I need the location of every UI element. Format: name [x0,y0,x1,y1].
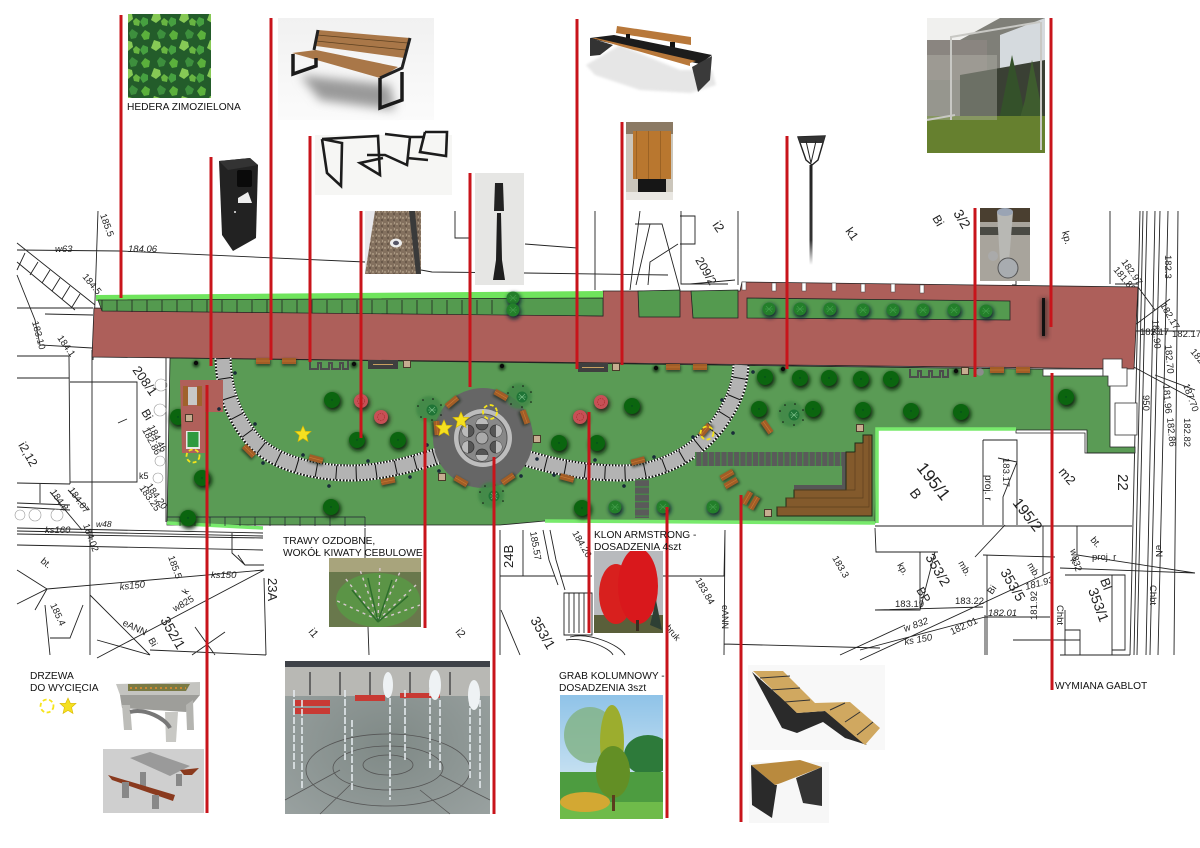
label: ornamental grasses: WOKÓŁ KIWATY CEBULOWE [283,546,423,559]
photo: chess table [103,749,204,813]
photo: wooden litter bin [626,122,673,200]
map annotations: w 832 [902,616,931,635]
plot labels: 183.17 [1000,458,1011,487]
plot labels: 195/1 [913,459,954,504]
map annotations: kp. [1059,230,1073,246]
hedge strip [96,291,603,319]
trees [170,369,1076,529]
fountain plaza [433,388,533,488]
photo: steel bike racks [315,132,452,195]
map annotations: BP [913,584,934,605]
map annotations: 184.06 [128,244,158,255]
map annotations: 184.20 [144,481,169,512]
map annotations: 184.26 [569,529,593,560]
map annotations: 182.01 [949,615,980,638]
long benches [368,360,608,372]
plot labels: 22 [1114,474,1131,491]
map annotations: 182.01 [988,608,1017,619]
ornamental shrubs [416,383,804,508]
map annotations: 185.57 [527,531,543,561]
label: trees to remove: DRZEWA [30,671,74,682]
map annotations: 182.86 [139,426,163,457]
map annotations: 183.84 [692,576,716,607]
map annotations: 187.70 [1180,382,1200,413]
map annotations: 181.93 [1024,575,1056,593]
map annotations: bt. [1088,535,1103,550]
map annotations: eANN [121,618,148,638]
map annotations: 181.96 [1160,384,1174,414]
label: trees to remove: DO WYCIĘCIA [30,683,99,694]
map annotations: 184.1 [55,333,77,359]
map annotations: bruk [663,623,683,643]
stepped timber deck [777,435,872,516]
map annotations: w48 [96,519,112,529]
photo: wooden lounger [748,665,885,750]
lawn bottom hatch [167,517,365,527]
photo: drinking fountain bollard [980,208,1030,281]
map annotations: 185.5 [165,554,184,580]
picnic zone [180,380,223,453]
street pavement [92,282,1138,369]
small path lights [218,371,754,487]
park lawn [167,358,1135,525]
map annotations: ks150 [211,570,237,581]
map annotations: Bi [138,406,156,423]
photo: columnar hornbeam [560,695,672,819]
map annotations: Chbt [1147,585,1158,605]
photo: wooden stool [749,760,829,823]
photo: street lamp [798,136,825,265]
dark paving strips [635,452,842,518]
map annotations: 184.46 [145,423,169,454]
trees to remove: dashed circles [186,405,714,462]
map annotations: 184.07 [66,485,91,516]
map annotations: 183.10 [29,320,47,351]
map annotations: 209/2 [692,254,720,288]
map annotations: 353/1 [1085,586,1112,624]
map annotations: 184.02 [80,522,100,553]
map annotations: 185.4 [47,602,67,628]
display case [1040,298,1048,338]
photo: bench with planter [586,26,716,93]
corner white boxes [1043,359,1137,435]
litter bins [186,360,968,516]
label: hornbeam: DOSADZENIA 3szt [559,683,646,694]
map annotations: 185.5 [97,212,116,238]
benches [241,358,1031,512]
map annotations: Bi [985,583,999,597]
map annotations: w832 [1067,547,1084,573]
map annotations: bt. [38,556,53,571]
plot labels: B [907,485,925,502]
map annotations: k1 [843,225,861,243]
map annotations: Bl [1097,576,1115,592]
map annotations: 181.92 [1029,591,1040,620]
trees to remove: stars [295,412,469,442]
map annotations: k [1067,556,1079,566]
map annotations: 182.70 [1162,344,1176,374]
paved path [223,358,741,473]
map annotations: Bi [929,212,947,229]
photo: concrete table football [116,682,200,742]
street planting beds [638,290,1010,320]
photo: dry fountain [285,661,490,814]
plot labels: proj. r [982,475,993,501]
label: trees to remove [30,671,99,694]
photo: ivy [128,14,211,98]
photo: misting curtain [927,18,1045,153]
map annotations: i1 [306,626,320,640]
red leader lines [121,15,1052,822]
map annotations: 183.19 [895,599,924,610]
map annotations: 3/2 [950,206,974,232]
photo: bollard lamp [475,173,524,285]
lamps [192,360,984,376]
label: maple: KLON ARMSTRONG - [594,530,696,541]
label: ornamental grasses [283,536,423,559]
photo: ground light in gravel [365,211,421,274]
map annotations: w825 [170,594,196,615]
plot labels: 195/2 [1009,495,1045,535]
map annotations [15,206,1200,652]
label: ivy: HEDERA ZIMOZIELONA [127,102,241,113]
map annotations: 182.17 [1140,327,1169,338]
street notches [742,282,924,293]
map annotations: 181.86 [1111,265,1138,294]
map annotations: mb. [955,559,973,578]
plot outline [1016,430,1135,453]
plot labels: m2 [1056,464,1079,488]
map annotations: eANN [720,605,730,629]
map annotations: kp. [894,561,910,577]
plot labels [907,458,1131,535]
photo: ornamental grass [329,558,421,627]
label: hornbeam: GRAB KOLUMNOWY - [559,671,665,682]
map annotations: ks150 [119,579,146,593]
map annotations: 23A [265,578,280,601]
map annotations: 208/1 [130,363,160,398]
map annotations: ks 150 [904,632,934,648]
red maples [354,394,610,427]
map annotations: 184.5 [80,272,103,297]
map annotations: k5 [139,471,149,481]
label: ornamental grasses: TRAWY OZDOBNE, [283,536,375,547]
site plan [92,282,1138,535]
map annotations: 183.25 [137,483,162,514]
label: maple [594,530,696,553]
bike racks [310,361,948,377]
map annotations: i2,12 [15,440,41,469]
label: hornbeam [559,671,665,694]
map annotations: 24B [501,545,516,568]
map annotations: ks160 [45,525,71,536]
map annotations: 353/1 [527,614,559,652]
bright green boundary [167,429,1016,528]
map annotations: w63 [55,244,73,255]
map annotations: i2 [453,626,467,640]
map annotations: eN [1153,545,1164,557]
map annotations: 184.8 [48,487,70,513]
map annotations: 182.97 [1119,257,1144,288]
map annotations: 182.82 [1181,418,1192,447]
map annotations: Bi [145,636,159,649]
photo: slatted bench [278,18,434,120]
photo: dog waste bin [219,158,258,251]
map annotations: 183.22 [955,596,984,607]
map annotations: 182.86 [1164,417,1178,447]
map annotations: k [180,587,192,596]
bed bushes [762,302,994,320]
map annotations: 182.3 [1162,255,1173,279]
map annotations: 950 [1140,395,1151,411]
legend icons: trees to remove [40,698,76,714]
map annotations: Chbt [1054,605,1065,625]
map annotations: 182.90 [1149,319,1163,349]
map annotations: 353/2 [922,550,954,589]
map annotations: 182.17 [1157,301,1181,332]
map annotations: i2 [710,218,728,235]
map annotations: proj. r [1092,552,1116,563]
map annotations: 183.3 [829,554,851,580]
label: maple: DOSADZENIA 4szt [594,542,681,553]
photo: Armstrong maple [594,548,663,633]
survey base map [15,211,1195,660]
map annotations: 352/1 [157,614,189,652]
label: display case replacement: WYMIANA GABLOT [1055,681,1147,692]
map annotations: 353/5 [997,566,1029,604]
map annotations: mb. [1024,561,1042,580]
